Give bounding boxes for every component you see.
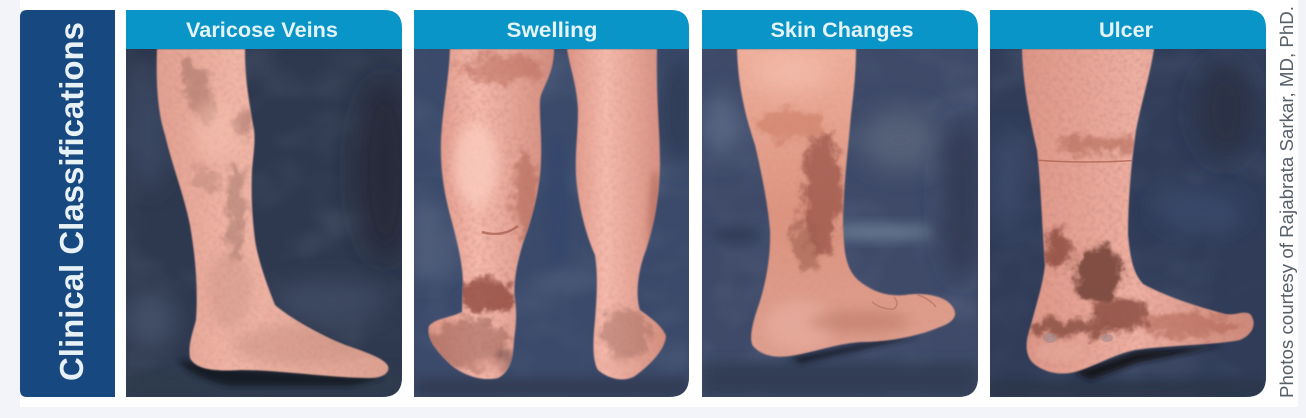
- header: Swelling: Swelling: [506, 19, 598, 42]
- panel: side heading: [20, 10, 115, 397]
- heading: Clinical Classifications: Clinical Classifications: [53, 22, 90, 381]
- panel: swelling: [412, 10, 694, 397]
- photo: leg with skin discoloration: [702, 45, 982, 397]
- header: Skin Changes: Skin Changes: [770, 19, 914, 42]
- photo: leg with ulcer: [990, 45, 1266, 397]
- credit text: Photos courtesy of Rajabrata Sarkar, MD, PhD.: [1277, 6, 1297, 398]
- header: Ulcer: Ulcer: [1099, 19, 1153, 42]
- panel: skin changes: [702, 10, 982, 397]
- photo: leg with varicose veins: [124, 45, 415, 397]
- photo: swollen legs: [412, 45, 694, 397]
- header: Varicose Veins: Varicose Veins: [186, 19, 338, 42]
- header: Varicose Veins: [126, 10, 402, 49]
- panel: varicose veins: [124, 10, 415, 397]
- header: Skin Changes: [702, 10, 978, 49]
- header: Swelling: [414, 10, 689, 49]
- panel: ulcer: [990, 10, 1266, 397]
- header: Ulcer: [990, 10, 1266, 49]
